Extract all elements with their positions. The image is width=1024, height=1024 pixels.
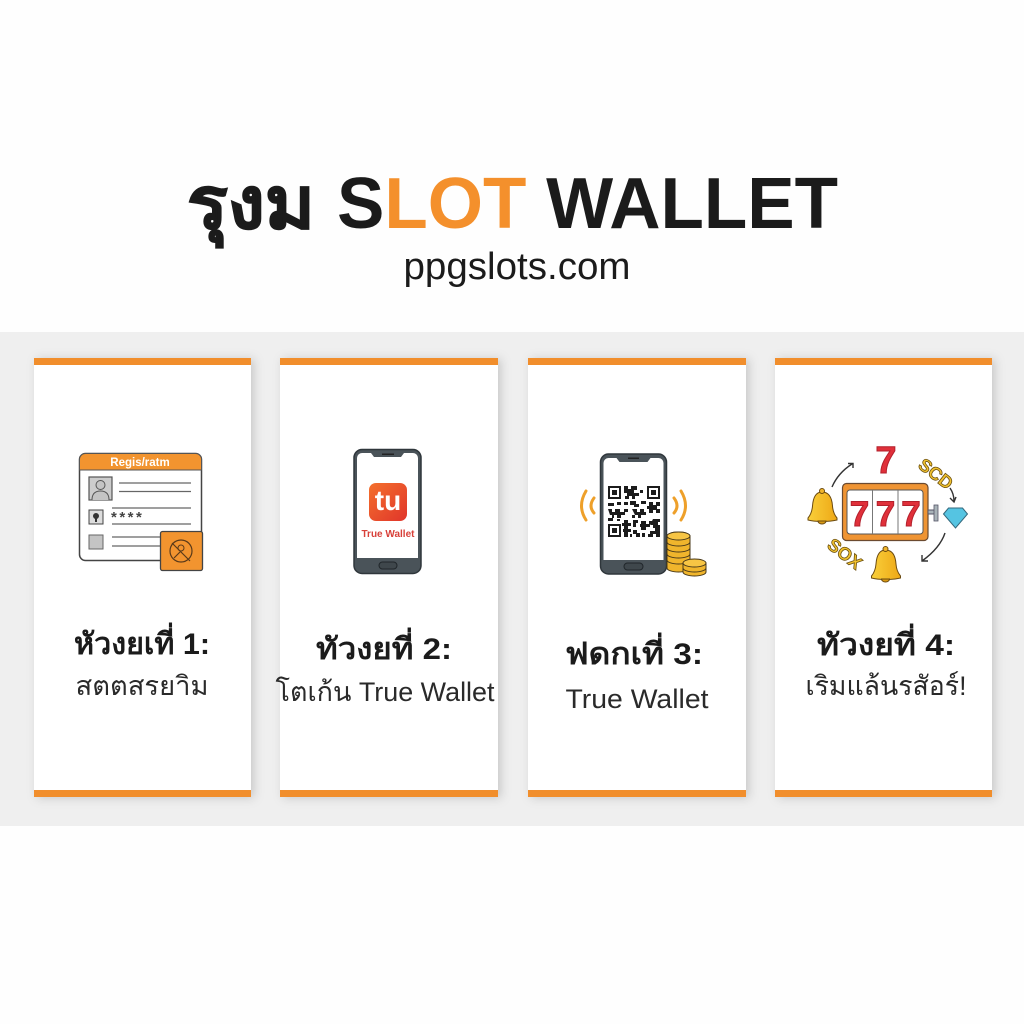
subtitle: website: ppgslots.com: [404, 246, 630, 288]
top seven: 7: [875, 440, 897, 482]
icon: phone with True Wallet: [354, 450, 421, 574]
icon: registration form: [80, 454, 202, 570]
step 4 heading: ทัวงยที่ 4:: [817, 623, 955, 662]
icon: slot machine: 7: [876, 495, 895, 534]
coin labels: SOX: [824, 534, 866, 574]
icon: slot machine: 7: [901, 495, 921, 534]
step 4 text: เริมแล้นรสัอร์!: [806, 670, 966, 701]
bell left: [808, 488, 837, 524]
icon: slot machine: [808, 440, 968, 582]
coin stacks: [667, 532, 706, 576]
coin labels: [824, 454, 957, 574]
title: SLOT WALLET: [337, 164, 838, 244]
cycle arrows: [832, 464, 956, 561]
icon: registration form: Regis/ratm: [110, 457, 170, 469]
panel: steps band: [0, 332, 1024, 826]
step 1 heading: หัวงยเที่ 1:: [74, 622, 210, 661]
title: รุงม: [187, 164, 315, 249]
coin labels: SCD: [915, 454, 957, 494]
step 3 text: True Wallet: [566, 684, 709, 714]
card 2: [276, 358, 498, 797]
step 2 text: โตเก้น True Wallet: [276, 677, 495, 707]
card 3: [528, 358, 746, 797]
icon: phone with QR code and coins: [582, 454, 706, 576]
step 3 heading: ฟดกเที่ 3:: [565, 632, 703, 671]
icon: registration form: ****: [111, 509, 144, 526]
logo: tu app icon: tu: [375, 485, 401, 516]
card 1: [34, 358, 251, 797]
diamond: [944, 508, 968, 528]
card 4: [775, 358, 992, 797]
signal waves: [582, 491, 686, 520]
step 2 heading: ทัวงยที่ 2:: [316, 627, 452, 666]
icon: slot machine: 7: [850, 495, 869, 534]
icon: phone with True Wallet: True Wallet: [362, 529, 415, 540]
QR code: [608, 486, 660, 537]
step 1 text: สตตสรยาิม: [76, 671, 208, 701]
bell bottom: [872, 546, 900, 582]
